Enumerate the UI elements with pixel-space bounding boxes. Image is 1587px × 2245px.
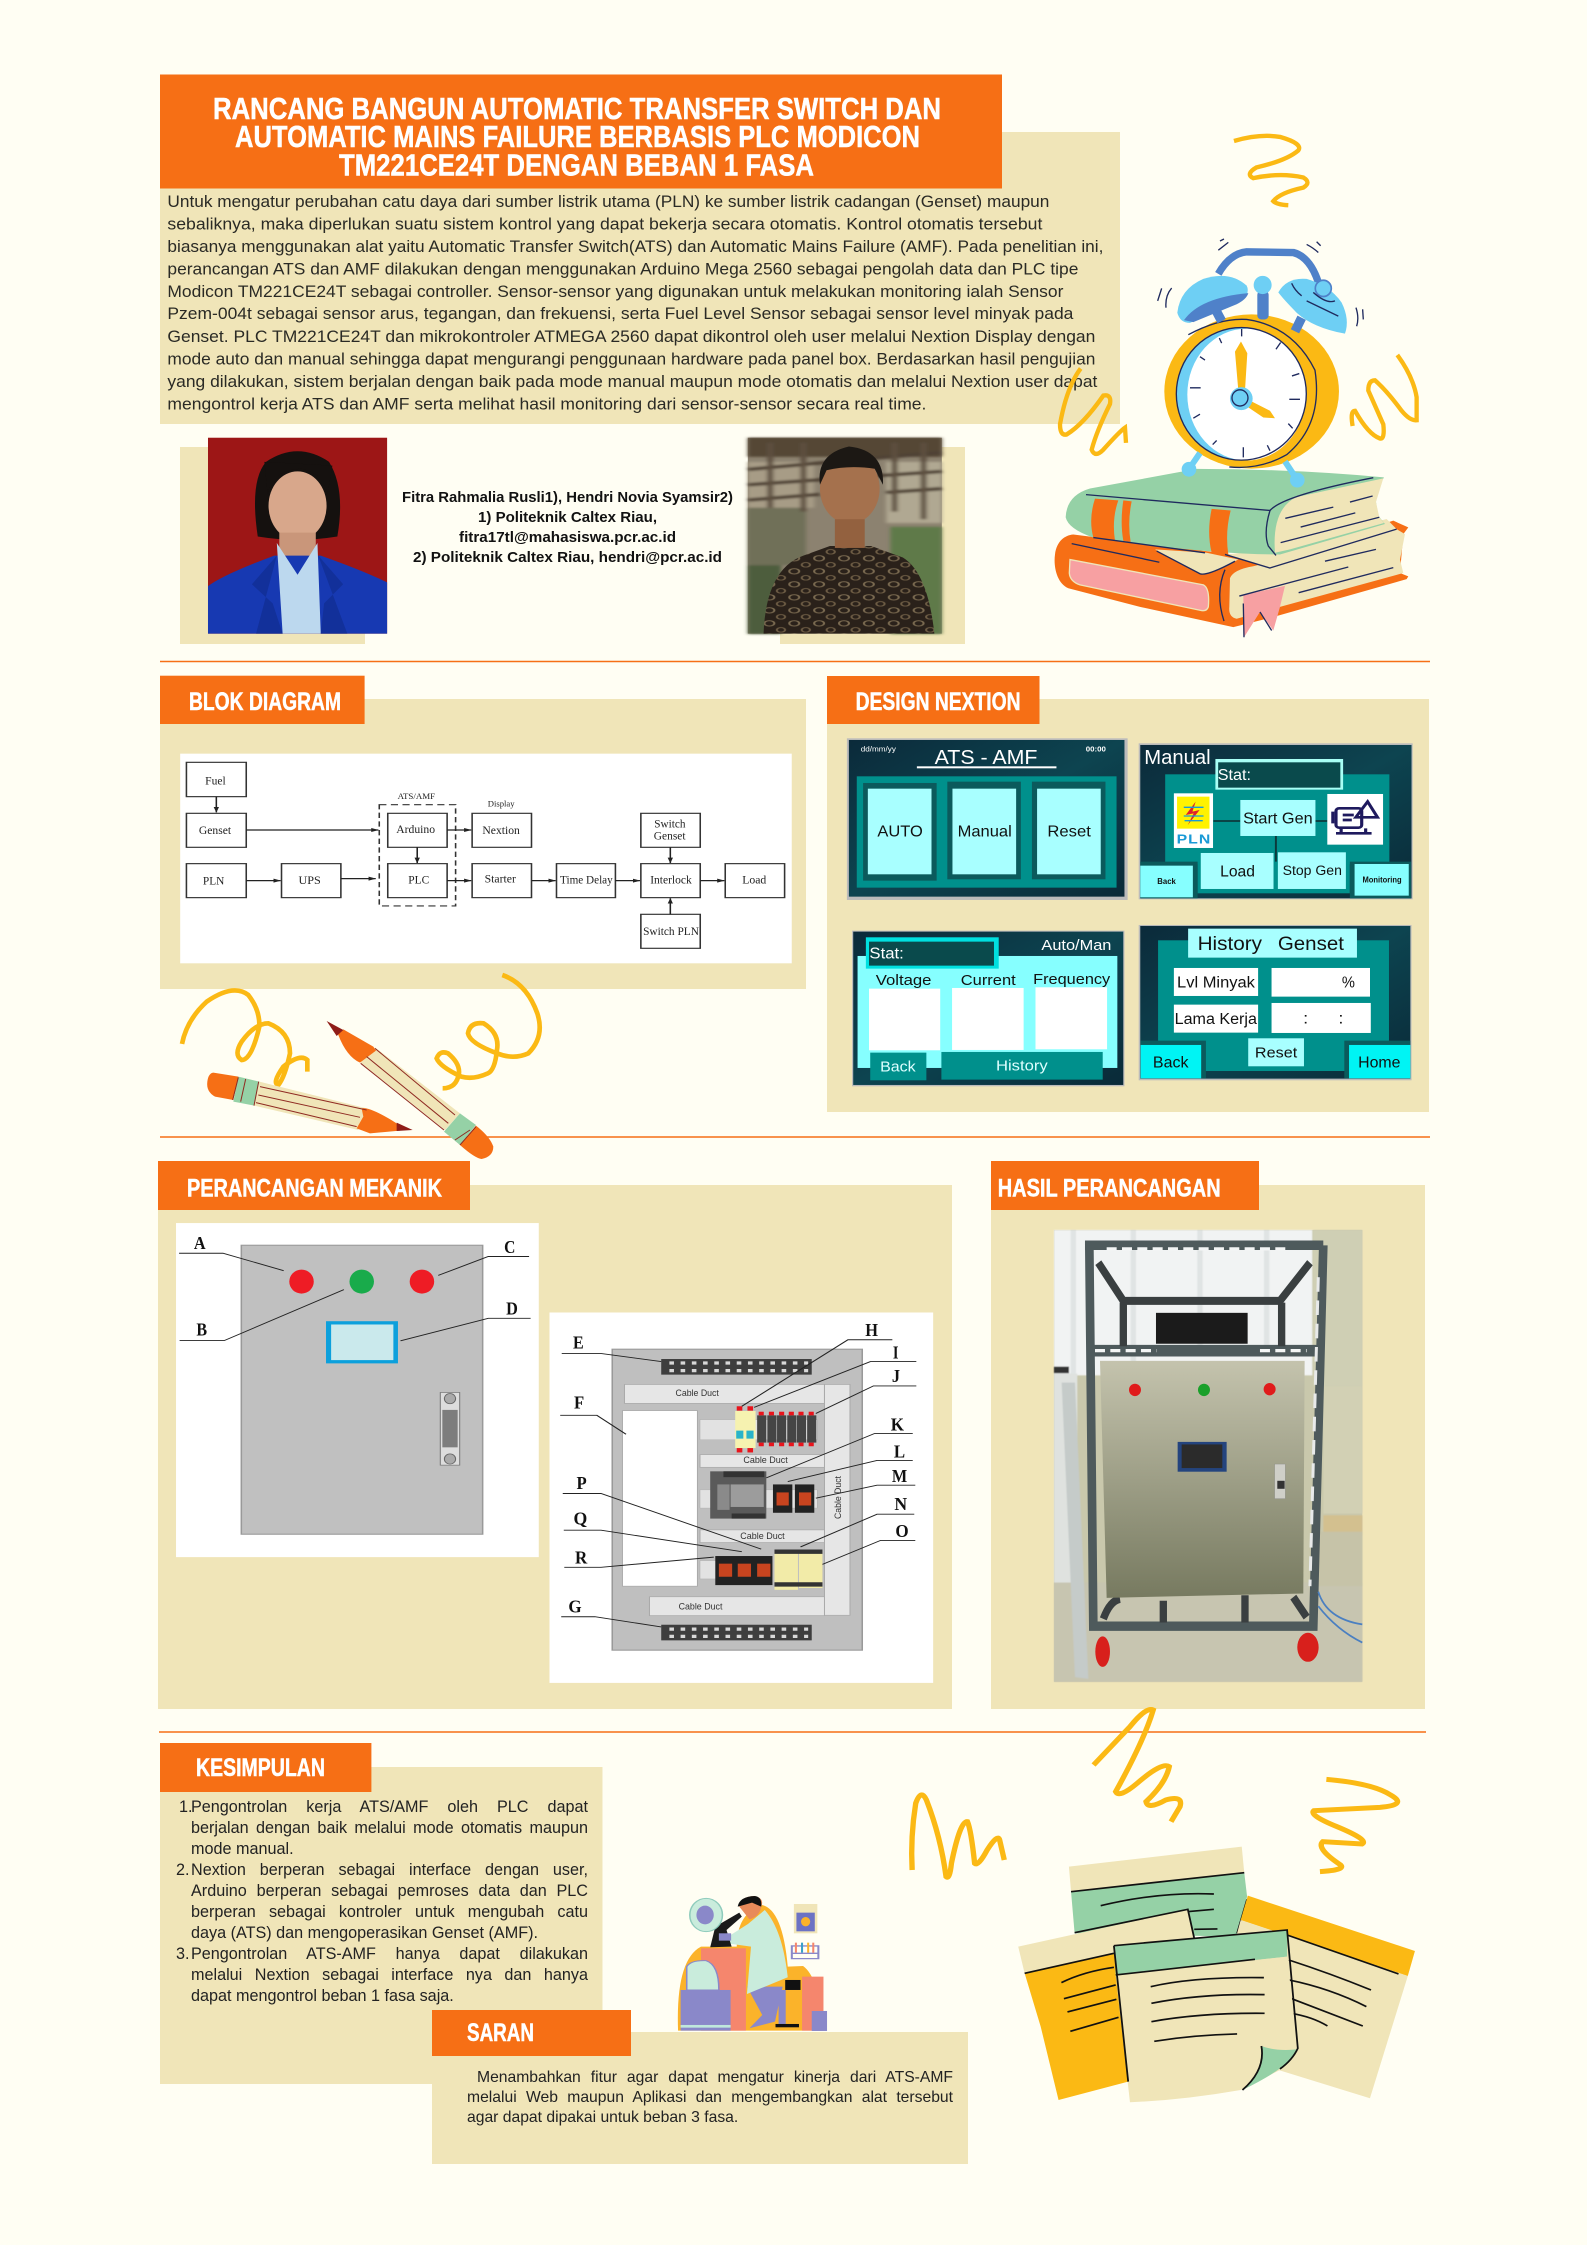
nextion screen: home: Manual [958, 822, 1012, 840]
photo: first author portrait [208, 438, 387, 634]
diagram: panel interior layout: J [892, 1366, 900, 1386]
list item 1 [179, 1798, 588, 1858]
text block: saran: Menambahkan fitur agar dapat mengatur kinerja dari ATS-AMF [477, 2069, 953, 2086]
list item 1: Pengontrolan kerja ATS/AMF oleh PLC dapat [191, 1798, 588, 1816]
author backing panel left [180, 447, 365, 644]
diagram: panel interior layout: F [574, 1392, 584, 1413]
panel: perancangan mekanik [158, 1161, 952, 1709]
abstract text: sebaliknya, maka diperlukan suatu sistem kontrol yang dapat bekerja secara otomatis. Kontrol otomatis tersebut [167, 214, 1043, 233]
author backing panel right [780, 447, 965, 644]
nextion screen: home: AUTO [877, 822, 923, 840]
nextion screen: history genset: : [1303, 1010, 1308, 1027]
heading: design nextion: DESIGN NEXTION [856, 688, 1021, 716]
panel: hasil perancangan [991, 1161, 1425, 1709]
diagram: panel interior layout: R [575, 1547, 588, 1568]
abstract text: yang dilakukan, sistem berjalan dengan baik pada mode manual maupun mode otomatis dan melalui Nextion user dapat [167, 372, 1098, 391]
nextion screen: home: 00:00 [1086, 745, 1106, 753]
nextion screen: monitoring: Current [961, 972, 1016, 989]
diagram: panel interior layout: G [568, 1596, 582, 1616]
text block: saran: melalui Web maupun Aplikasi dan mengembangkan alat tersebut [467, 2089, 953, 2106]
diagram: panel interior layout: E [573, 1332, 584, 1353]
photo: second author portrait [748, 438, 942, 634]
list item 2: Arduino berperan sebagai pemroses data dan PLC [191, 1882, 588, 1900]
heading: saran [432, 2010, 631, 2056]
diagram: panel interior layout: H [865, 1320, 878, 1340]
panel: blok diagram [160, 676, 806, 989]
diagram: panel interior layout: I [893, 1342, 898, 1363]
chart: system block diagram: Starter [485, 872, 516, 886]
author names and affiliations: Fitra Rahmalia Rusli1), Hendri Novia Syamsir2) [402, 489, 733, 506]
nextion screen: monitoring: Voltage [876, 972, 932, 989]
nextion screen: history genset [1139, 925, 1412, 1080]
list item 2 [176, 1861, 588, 1942]
text block: saran: agar dapat dipakai untuk beban 3 fasa. [467, 2109, 738, 2126]
heading: kesimpulan: KESIMPULAN [196, 1754, 325, 1782]
chart: system block diagram: Display [488, 800, 515, 809]
list item 1: berjalan dengan baik melalui mode otomatis maupun [191, 1819, 588, 1837]
illustration: alarm clock on stacked books with squiggles [1055, 136, 1417, 637]
chart: system block diagram: Genset [654, 829, 686, 843]
nextion screen: history genset: Reset [1255, 1045, 1298, 1061]
abstract text: mode auto dan manual sehingga dapat mengurangi penggunaan hardware pada panel box. Berdasarkan hasil pengujian [167, 349, 1095, 368]
list item 3: 3. [176, 1945, 190, 1963]
title bar: AUTOMATIC MAINS FAILURE BERBASIS PLC MODICON [235, 119, 920, 154]
nextion screen: manual: PLN [1177, 832, 1210, 847]
illustration: sticky notes and squiggles [912, 1710, 1415, 2102]
abstract panel [160, 132, 1120, 424]
abstract text: mengontrol kerja ATS dan AMF serta melihat hasil monitoring dari sensor-sensor secara real time. [167, 394, 926, 414]
text block: saran [467, 2069, 953, 2126]
section divider top [160, 660, 1430, 662]
nextion screen: manual [1139, 743, 1413, 899]
photo: finished panel on frame [1054, 1230, 1362, 1682]
nextion screen: manual: Load [1220, 863, 1255, 880]
nextion screen: monitoring: Auto/Man [1041, 937, 1111, 954]
diagram: panel interior layout: Cable Duct [679, 1602, 723, 1612]
abstract text: Genset. PLC TM221CE24T dan mikrokontroler ATMEGA 2560 dapat dikontrol oleh user melalui Nextion Display dengan [167, 327, 1095, 346]
heading: blok diagram: BLOK DIAGRAM [189, 688, 341, 716]
nextion screen: history genset: Genset [1278, 934, 1344, 955]
list item 2: Nextion berperan sebagai interface dengan user, [191, 1861, 588, 1879]
diagram: panel interior layout: Cable Duct [832, 1476, 843, 1519]
nextion screen: history genset: Back [1153, 1054, 1189, 1071]
chart: system block diagram: Time Delay [560, 873, 613, 887]
abstract text: biasanya menggunakan alat yaitu Automatic Transfer Switch(ATS) dan Automatic Mains Failure (AMF). Pada penelitian ini, [167, 237, 1103, 256]
diagram: panel interior layout: Cable Duct [740, 1532, 785, 1541]
panel: design nextion [827, 676, 1429, 1112]
abstract text: perancangan ATS dan AMF dilakukan dengan menggunakan Arduino Mega 2560 sebagai pengolah data dan PLC tipe [167, 260, 1078, 278]
nextion screen: history genset: % [1342, 974, 1355, 991]
list item 1: 1. [179, 1798, 193, 1816]
diagram: panel interior layout: L [894, 1441, 905, 1462]
panel: saran [432, 2010, 968, 2164]
nextion screen: home: ATS - AMF [935, 745, 1037, 769]
chart: system block diagram: PLC [408, 873, 429, 887]
diagram: panel interior layout: N [894, 1493, 907, 1514]
list item 2: 2. [176, 1861, 190, 1879]
nextion screen: monitoring [852, 931, 1124, 1086]
chart: system block diagram: UPS [298, 874, 321, 887]
illustration: scientist at microscope [678, 1896, 827, 2031]
list item 3: Pengontrolan ATS-AMF hanya dapat dilakukan [191, 1945, 588, 1963]
nextion screen: home [847, 738, 1128, 900]
diagram: panel door front: C [504, 1236, 515, 1257]
nextion screen: manual: Stop Gen [1283, 863, 1342, 879]
list item 3 [176, 1945, 588, 2005]
heading: saran: SARAN [467, 2019, 534, 2047]
panel: kesimpulan [160, 1743, 602, 2084]
list item 3: melalui Nextion sebagai interface nya dan hanya [191, 1966, 588, 1984]
chart: system block diagram: PLN [203, 874, 224, 888]
diagram: panel interior layout [549, 1312, 933, 1683]
chart: system block diagram: Load [742, 873, 766, 887]
nextion screen: history genset: Lvl Minyak [1177, 974, 1256, 991]
chart: system block diagram: Switch PLN [643, 925, 699, 938]
nextion screen: history genset: : [1338, 1010, 1343, 1027]
diagram: panel interior layout: Q [573, 1508, 587, 1529]
nextion screen: manual: Start Gen [1243, 810, 1313, 827]
list item 2: berperan sebagai kontroler untuk mengubah catu [191, 1903, 588, 1921]
abstract text: Untuk mengatur perubahan catu daya dari sumber listrik utama (PLN) ke sumber listrik cadangan (Genset) maupun [167, 192, 1049, 211]
nextion screen: manual: Manual [1144, 746, 1211, 769]
heading: hasil perancangan: HASIL PERANCANGAN [998, 1174, 1221, 1202]
chart: system block diagram: ATS/AMF [398, 792, 435, 802]
title bar: TM221CE24T DENGAN BEBAN 1 FASA [339, 148, 814, 182]
diagram: panel interior layout: O [895, 1521, 909, 1541]
author names and affiliations: fitra17tl@mahasiswa.pcr.ac.id [459, 529, 676, 546]
chart: system block diagram: Nextion [482, 824, 520, 837]
diagram: panel door front [176, 1223, 539, 1557]
heading: perancangan mekanik: PERANCANGAN MEKANIK [187, 1174, 442, 1202]
diagram: panel interior layout: Cable Duct [676, 1389, 719, 1399]
chart: system block diagram: Genset [199, 824, 231, 837]
nextion screen: manual: Monitoring [1362, 875, 1402, 884]
abstract text: Pzem-004t sebagai sensor arus, tegangan, dan frekuensi, serta Fuel Level Sensor sebagai sensor level minyak pada [167, 304, 1074, 323]
list item 1: mode manual. [191, 1840, 294, 1858]
abstract text: Modicon TM221CE24T sebagai controller. Sensor-sensor yang digunakan untuk melakukan monitoring ialah Sensor [167, 282, 1064, 301]
author names and affiliations [402, 489, 733, 566]
heading: design nextion [827, 676, 1040, 724]
nextion screen: history genset: History [1198, 934, 1262, 955]
diagram: panel door front: B [196, 1319, 207, 1340]
title bar [160, 74, 1002, 188]
nextion screen: monitoring: Stat: [869, 945, 904, 962]
author names and affiliations: 1) Politeknik Caltex Riau, [478, 509, 657, 526]
list item 3: dapat mengontrol beban 1 fasa saja. [191, 1987, 454, 2005]
diagram: panel door front: D [506, 1298, 518, 1318]
nextion screen: home: Reset [1047, 822, 1091, 840]
heading: hasil perancangan [991, 1161, 1259, 1210]
diagram: panel interior layout: Cable Duct [743, 1456, 788, 1465]
title bar: RANCANG BANGUN AUTOMATIC TRANSFER SWITCH DAN [213, 91, 941, 126]
heading: perancangan mekanik [158, 1161, 470, 1210]
chart: system block diagram: Arduino [396, 823, 435, 836]
abstract text [167, 192, 1103, 414]
chart: system block diagram: Switch [654, 817, 686, 831]
diagram: panel door front: A [194, 1232, 206, 1253]
diagram: panel interior layout: P [577, 1473, 587, 1493]
heading: kesimpulan [160, 1743, 371, 1792]
heading: blok diagram [160, 676, 365, 724]
nextion screen: history genset: Lama Kerja [1175, 1010, 1258, 1028]
nextion screen: monitoring: History [996, 1058, 1048, 1074]
chart: system block diagram: Fuel [205, 774, 226, 788]
nextion screen: manual: Stat: [1218, 766, 1251, 784]
illustration: pencils and squiggles [182, 975, 540, 1159]
nextion screen: history genset: Home [1358, 1054, 1400, 1071]
chart: system block diagram [180, 754, 792, 963]
chart: system block diagram: Interlock [650, 873, 692, 887]
author names and affiliations: 2) Politeknik Caltex Riau, hendri@pcr.ac.id [413, 549, 722, 566]
nextion screen: monitoring: Frequency [1033, 971, 1110, 988]
list item 2: daya (ATS) dan mengoperasikan Genset (AMF). [191, 1924, 538, 1942]
nextion screen: home: dd/mm/yy [861, 745, 896, 753]
diagram: panel interior layout: M [892, 1466, 907, 1486]
text block: kesimpulan list [176, 1798, 588, 2005]
diagram: panel interior layout: K [891, 1414, 905, 1435]
nextion screen: monitoring: Back [880, 1059, 917, 1075]
section divider lower [159, 1731, 1426, 1733]
section divider middle [160, 1136, 1430, 1138]
nextion screen: manual: Back [1157, 877, 1176, 886]
